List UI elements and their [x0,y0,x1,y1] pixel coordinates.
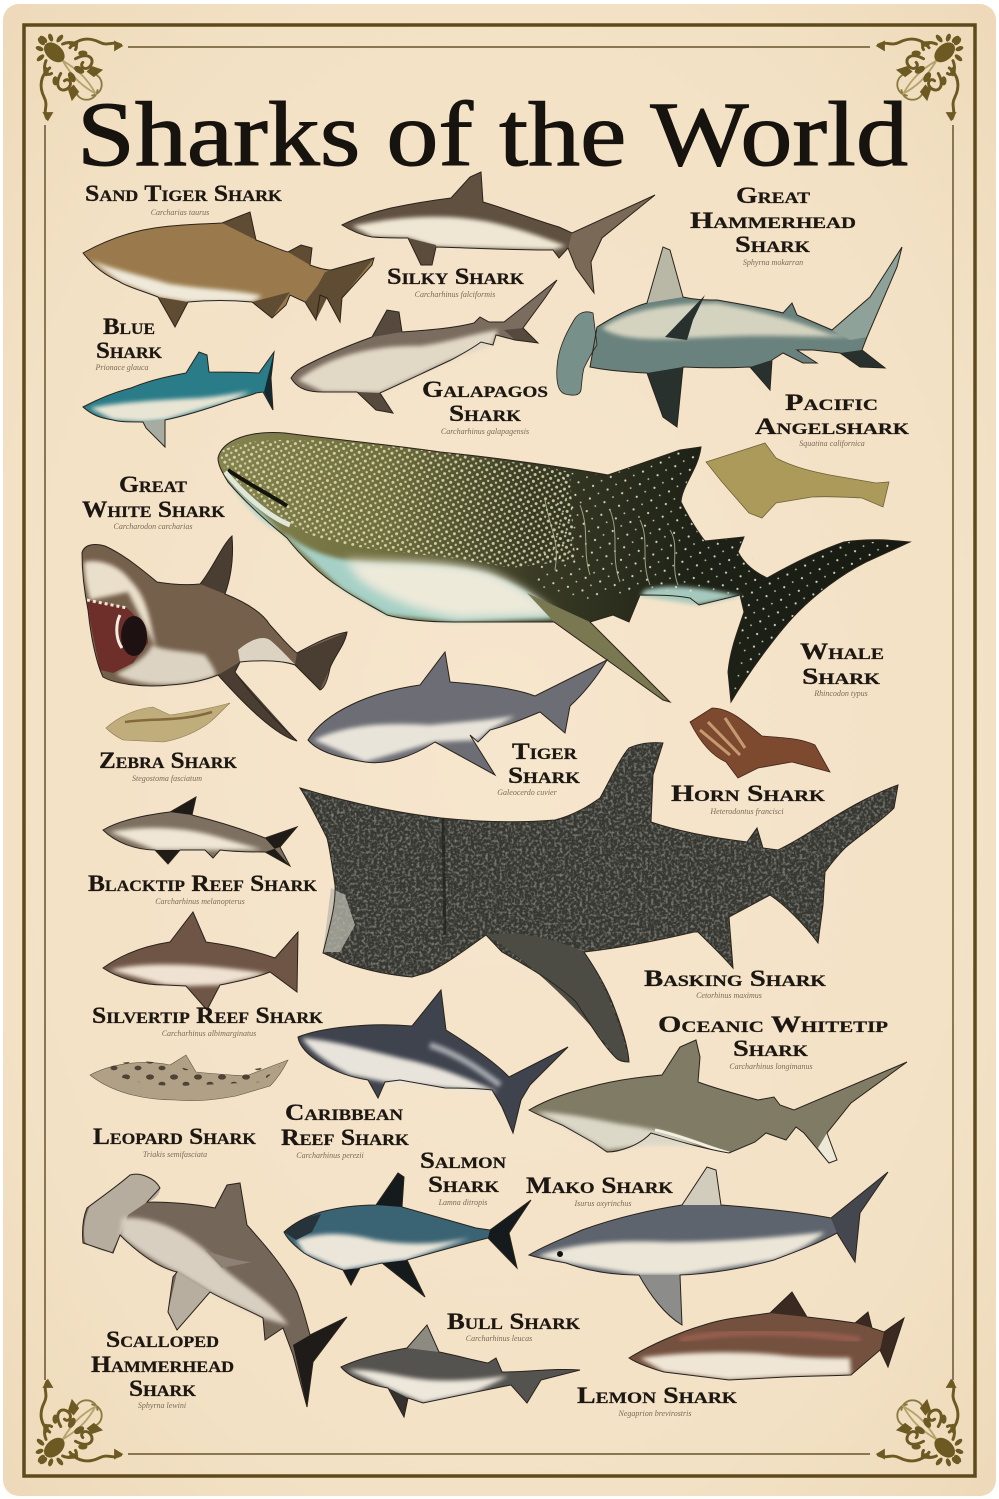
shark: galapagos [291,280,557,413]
label: basking shark: Basking Shark [644,966,827,991]
label: silky shark: Silky Shark [387,264,525,289]
label: basking shark [644,966,827,1000]
label: whale shark [800,639,884,698]
shark: blue [83,352,274,447]
label: blue shark: Blue [103,314,155,339]
label: salmon shark: Salmon [420,1148,507,1173]
label: zebra shark [99,748,238,783]
label: caribbean reef shark: Carcharhinus perezii [296,1151,364,1160]
shark: great hammerhead [557,247,902,427]
label: pacific angelshark: Angelshark [755,414,910,439]
shark: blacktip reef [103,797,297,866]
label: zebra shark: Zebra Shark [99,748,238,773]
label: leopard shark: Leopard Shark [93,1124,257,1149]
label: blue shark [94,314,163,372]
label: basking shark: Cetorhinus maximus [696,991,762,1000]
label: salmon shark [420,1148,507,1207]
shark: silky [342,172,655,293]
label: zebra shark: Stegostoma fasciatum [132,774,202,783]
shark: horn [690,708,830,778]
label: silky shark [387,264,525,299]
label: scalloped hammerhead shark: Shark [129,1376,197,1401]
label: great hammerhead shark: Shark [735,232,811,257]
label: oceanic whitetip shark [658,1012,888,1071]
label: leopard shark [93,1124,257,1159]
shark: salmon [284,1173,531,1297]
shark: lemon [629,1292,904,1380]
label: caribbean reef shark: Reef Shark [281,1125,410,1150]
label: salmon shark: Lamna ditropis [438,1198,487,1207]
label: silvertip reef shark: Silvertip Reef Shark [92,1003,324,1028]
label: silvertip reef shark [92,1003,324,1038]
label: horn shark: Horn Shark [671,781,826,806]
label: oceanic whitetip shark: Shark [733,1036,809,1061]
label: blacktip reef shark [88,871,318,906]
label: tiger shark: Tiger [512,739,578,764]
label: pacific angelshark: Pacific [785,390,878,415]
label: scalloped hammerhead shark: Sphyrna lewini [138,1401,186,1410]
label: tiger shark: Shark [508,763,581,788]
label: bull shark: Carcharhinus leucas [466,1334,532,1343]
label: lemon shark [577,1383,738,1418]
shark: silvertip reef [103,912,298,1010]
label: oceanic whitetip shark: Oceanic Whitetip [658,1012,888,1037]
title: Sharks of the World [77,83,908,185]
label: bull shark [447,1309,581,1343]
shark: whale [218,432,910,702]
label: silvertip reef shark: Carcharhinus albimarginatus [162,1029,256,1038]
shark: leopard [90,1055,288,1101]
label: whale shark: Rhincodon typus [813,689,868,698]
shark: scalloped hammerhead [82,1174,347,1407]
label: lemon shark: Negaprion brevirostris [618,1409,691,1418]
label: great hammerhead shark: Sphyrna mokarran [743,258,803,267]
label: mako shark: Isurus oxyrinchus [573,1199,632,1208]
label: scalloped hammerhead shark: Hammerhead [91,1352,234,1377]
label: tiger shark: Galeocerdo cuvier [497,788,558,797]
shark: tiger [308,652,607,775]
label: lemon shark: Lemon Shark [577,1383,738,1408]
label: bull shark: Bull Shark [447,1309,581,1334]
shark: pacific angelshark [706,443,889,518]
shark: oceanic whitetip [529,1040,907,1163]
label: whale shark: Shark [802,664,881,689]
label: horn shark [671,781,826,816]
label: leopard shark: Triakis semifasciata [143,1150,207,1159]
label: sand tiger shark [85,181,283,217]
label: great white shark: Carcharodon carcharias [114,522,192,531]
shark: mako [529,1167,888,1325]
label: blacktip reef shark: Carcharhinus melanopterus [155,897,245,906]
label: silky shark: Carcharhinus falciformis [415,290,495,299]
shark: bull [341,1325,580,1417]
label: scalloped hammerhead shark [91,1327,234,1410]
shark: basking [300,743,898,1062]
label: mako shark: Mako Shark [526,1173,674,1198]
label: sand tiger shark: Carcharias taurus [151,208,209,217]
shark: zebra [106,703,230,742]
label: great white shark: White Shark [82,497,226,522]
label: galapagos shark: Galapagos [422,377,548,402]
label: scalloped hammerhead shark: Scalloped [106,1327,219,1352]
label: great hammerhead shark [690,183,856,267]
label: blacktip reef shark: Blacktip Reef Shark [88,871,318,896]
label: galapagos shark: Carcharhinus galapagensis [441,427,529,436]
label: caribbean reef shark: Caribbean [285,1100,404,1125]
label: caribbean reef shark [281,1100,410,1160]
label: whale shark: Whale [800,639,884,664]
label: blue shark: Prionace glauca [94,363,149,372]
label: blue shark: Shark [96,338,163,363]
label: horn shark: Heterodontus francisci [709,807,784,816]
label: pacific angelshark [755,390,910,448]
label: great white shark: Great [119,472,187,497]
label: salmon shark: Shark [428,1172,500,1197]
label: great hammerhead shark: Hammerhead [690,208,856,233]
label: mako shark [526,1173,674,1208]
label: galapagos shark: Shark [449,401,522,426]
label: great hammerhead shark: Great [736,183,810,208]
label: galapagos shark [422,377,548,436]
shark: sand tiger [83,212,374,327]
label: pacific angelshark: Squatina californica [799,439,865,448]
label: sand tiger shark: Sand Tiger Shark [85,181,283,206]
label: tiger shark [497,739,581,797]
shark: great white [82,536,347,741]
shark: caribbean reef [298,990,568,1133]
label: great white shark [82,472,226,531]
label: oceanic whitetip shark: Carcharhinus longimanus [729,1062,813,1071]
